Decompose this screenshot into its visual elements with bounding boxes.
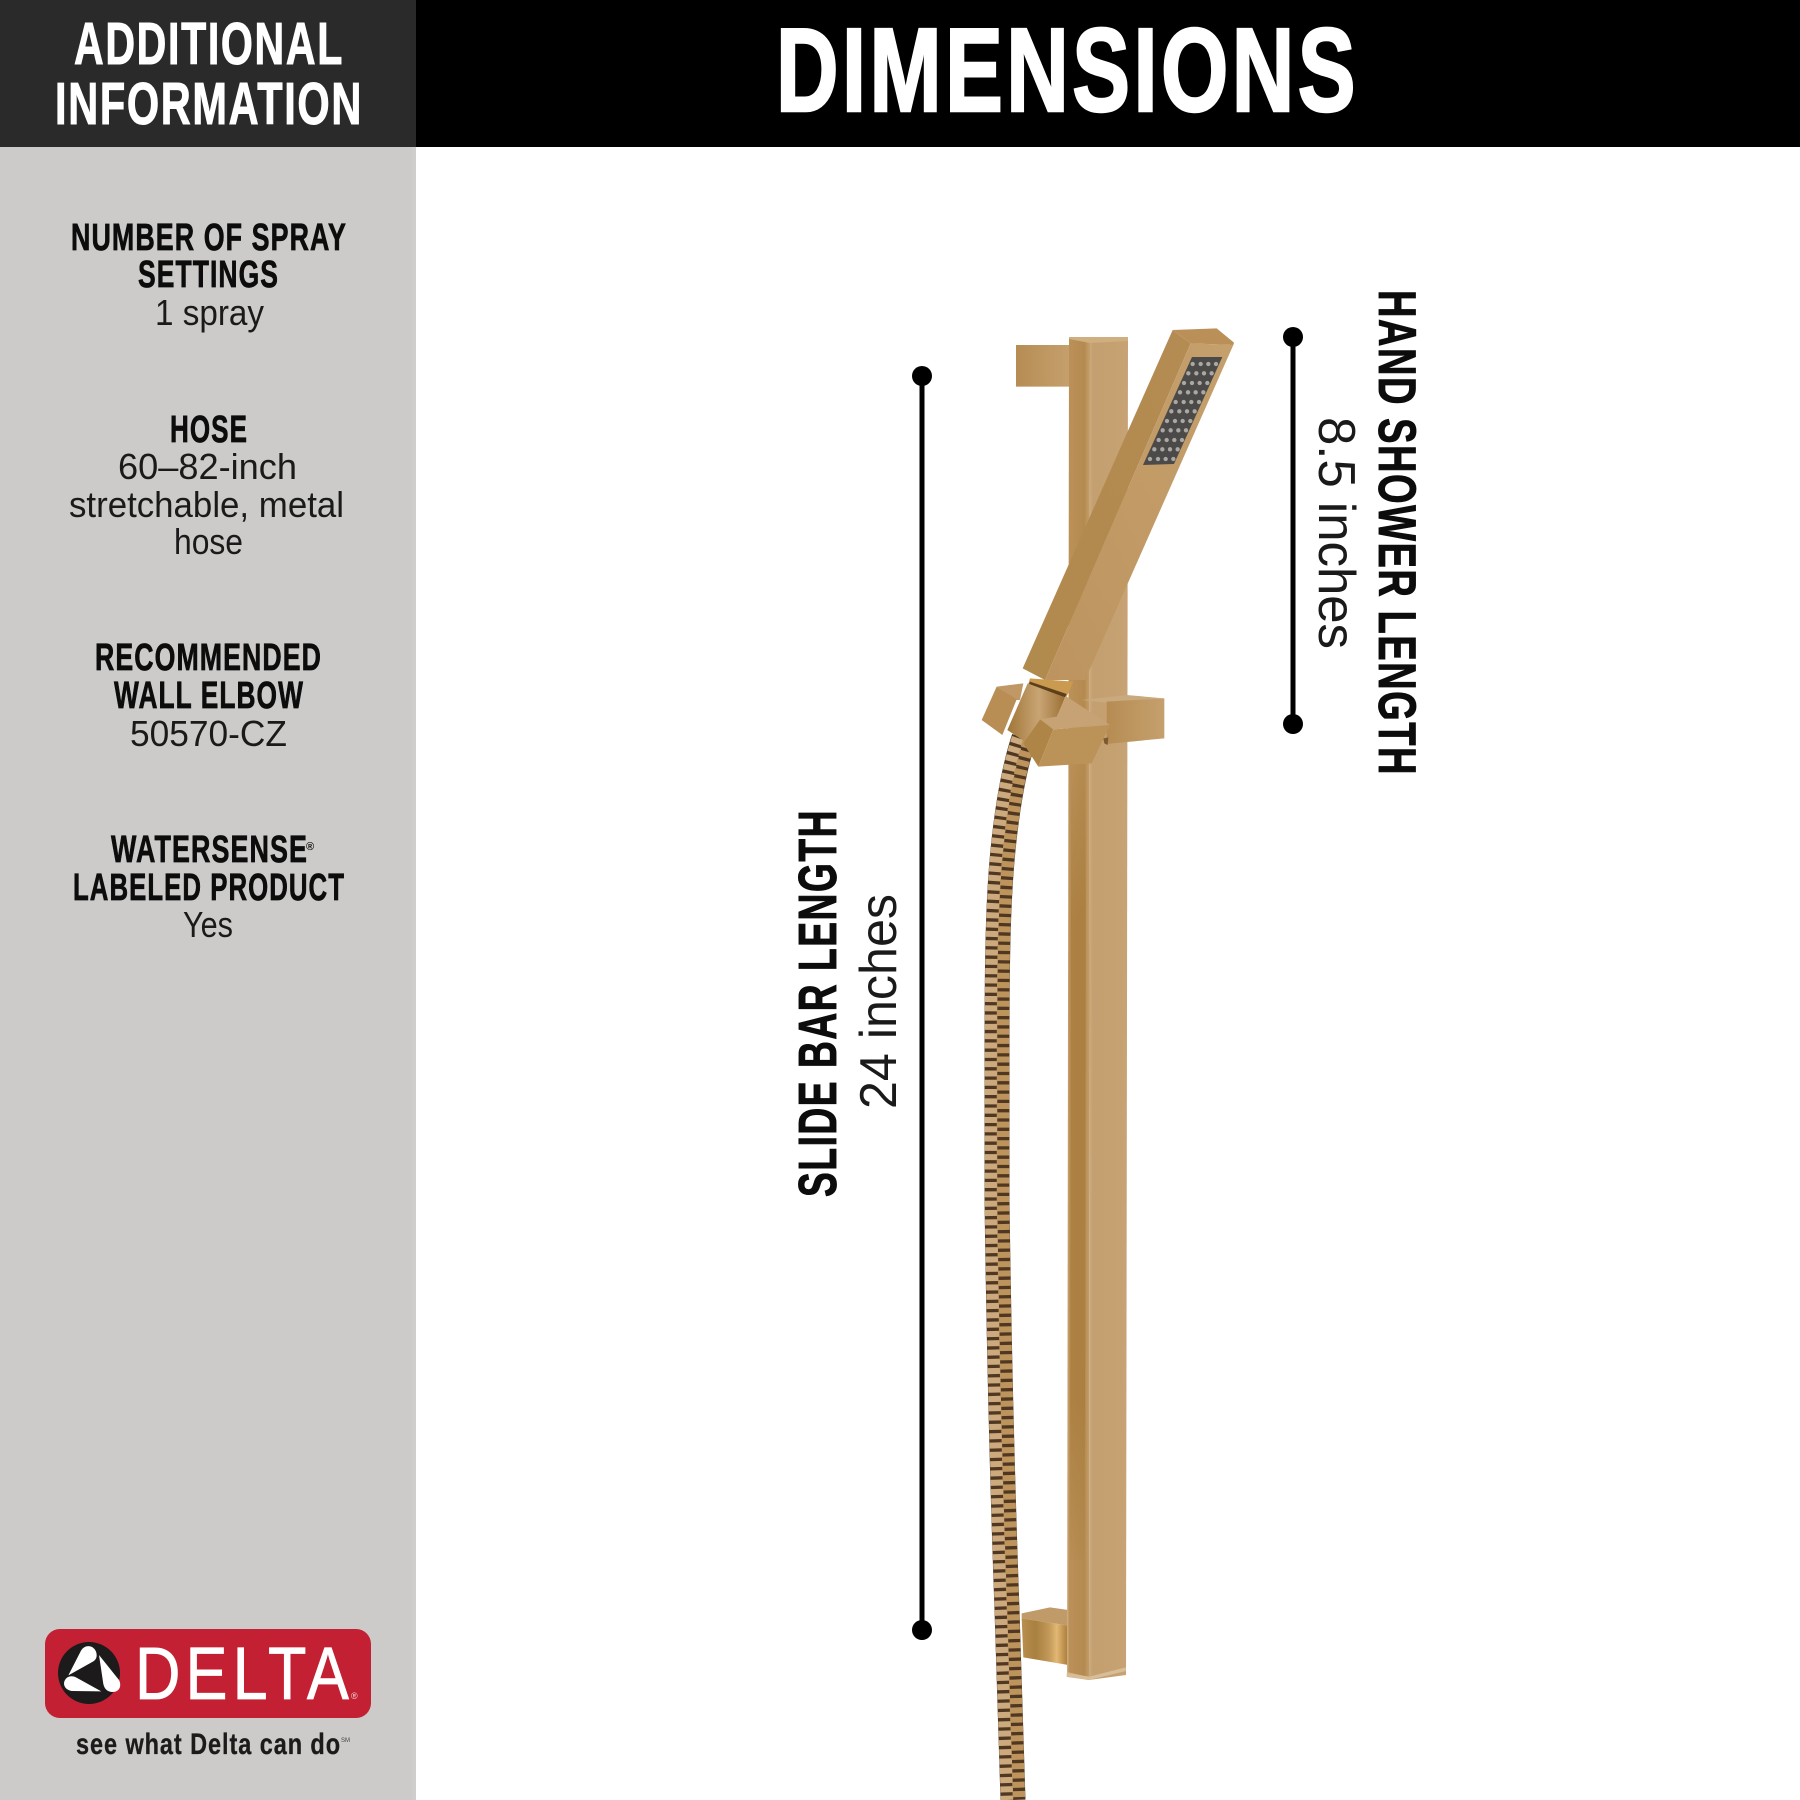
text block: watersense labeled product [73, 829, 345, 945]
label: slide bar length [788, 809, 908, 1197]
label: hand shower length: 8.5 inches [1307, 417, 1365, 649]
swivel cylinder [1007, 683, 1065, 742]
text block: hose [69, 409, 344, 562]
text block: number of spray settings: 1 spray [155, 292, 264, 333]
top wall bracket [1016, 345, 1070, 387]
dimension line: slide bar [912, 366, 932, 1640]
icon: delta triangle mark [58, 1642, 120, 1704]
swivel mount [982, 678, 1164, 767]
label: hand shower length [1307, 290, 1426, 776]
left cube [997, 683, 1023, 700]
tagline: see what Delta can do [76, 1728, 341, 1761]
text block: recommended wall elbow: 50570-CZ [130, 713, 287, 754]
title bar: dimensions [416, 0, 1800, 147]
text block: recommended wall elbow [95, 637, 322, 754]
main block [1038, 696, 1110, 729]
logo: delta [45, 1629, 371, 1718]
logo: delta: ® [351, 1691, 358, 1701]
text block: hose: HOSE [170, 409, 248, 451]
label: hand shower length: HAND SHOWER LENGTH [1367, 290, 1426, 776]
swivel collar [1028, 678, 1073, 697]
heading: additional information [0, 0, 416, 147]
text block: number of spray settings: SETTINGS [138, 254, 279, 296]
text block: hose: stretchable, metal [69, 484, 344, 525]
hose [991, 738, 1030, 1800]
text block: recommended wall elbow: RECOMMENDED [95, 637, 322, 679]
logo wordmark: DELTA [135, 1632, 354, 1715]
text block: watersense labeled product: WATERSENSE [111, 829, 308, 871]
panel: additional information sidebar [0, 0, 416, 1800]
right clamp block [1082, 695, 1164, 703]
text block: hose: hose [174, 521, 243, 562]
text block: watersense labeled product: LABELED PRODUCT [73, 867, 345, 909]
dimension line: hand shower [1283, 327, 1303, 734]
text block: watersense labeled product: ® [306, 841, 314, 853]
label: slide bar length: 24 inches [850, 894, 908, 1109]
bottom wall bracket [1022, 1607, 1068, 1665]
text block: number of spray settings: NUMBER OF SPRAY [71, 217, 347, 259]
slide bar [1067, 337, 1128, 1680]
tagline: SM [341, 1738, 350, 1744]
heading: additional information: ADDITIONAL [74, 11, 344, 77]
heading: additional information: INFORMATION [55, 71, 363, 137]
text block: watersense labeled product: Yes [183, 904, 233, 945]
spray face grille [1143, 357, 1222, 465]
text block: number of spray settings [71, 217, 347, 333]
hand shower [1023, 328, 1234, 680]
label: slide bar length: SLIDE BAR LENGTH [788, 809, 848, 1197]
text block: recommended wall elbow: WALL ELBOW [114, 675, 304, 717]
bar foot cap [1067, 1667, 1126, 1680]
product: shower slide bar with hand shower and hose [982, 328, 1234, 1800]
title bar: dimensions: DIMENSIONS [776, 4, 1359, 137]
text block: hose: 60–82-inch [118, 446, 297, 487]
